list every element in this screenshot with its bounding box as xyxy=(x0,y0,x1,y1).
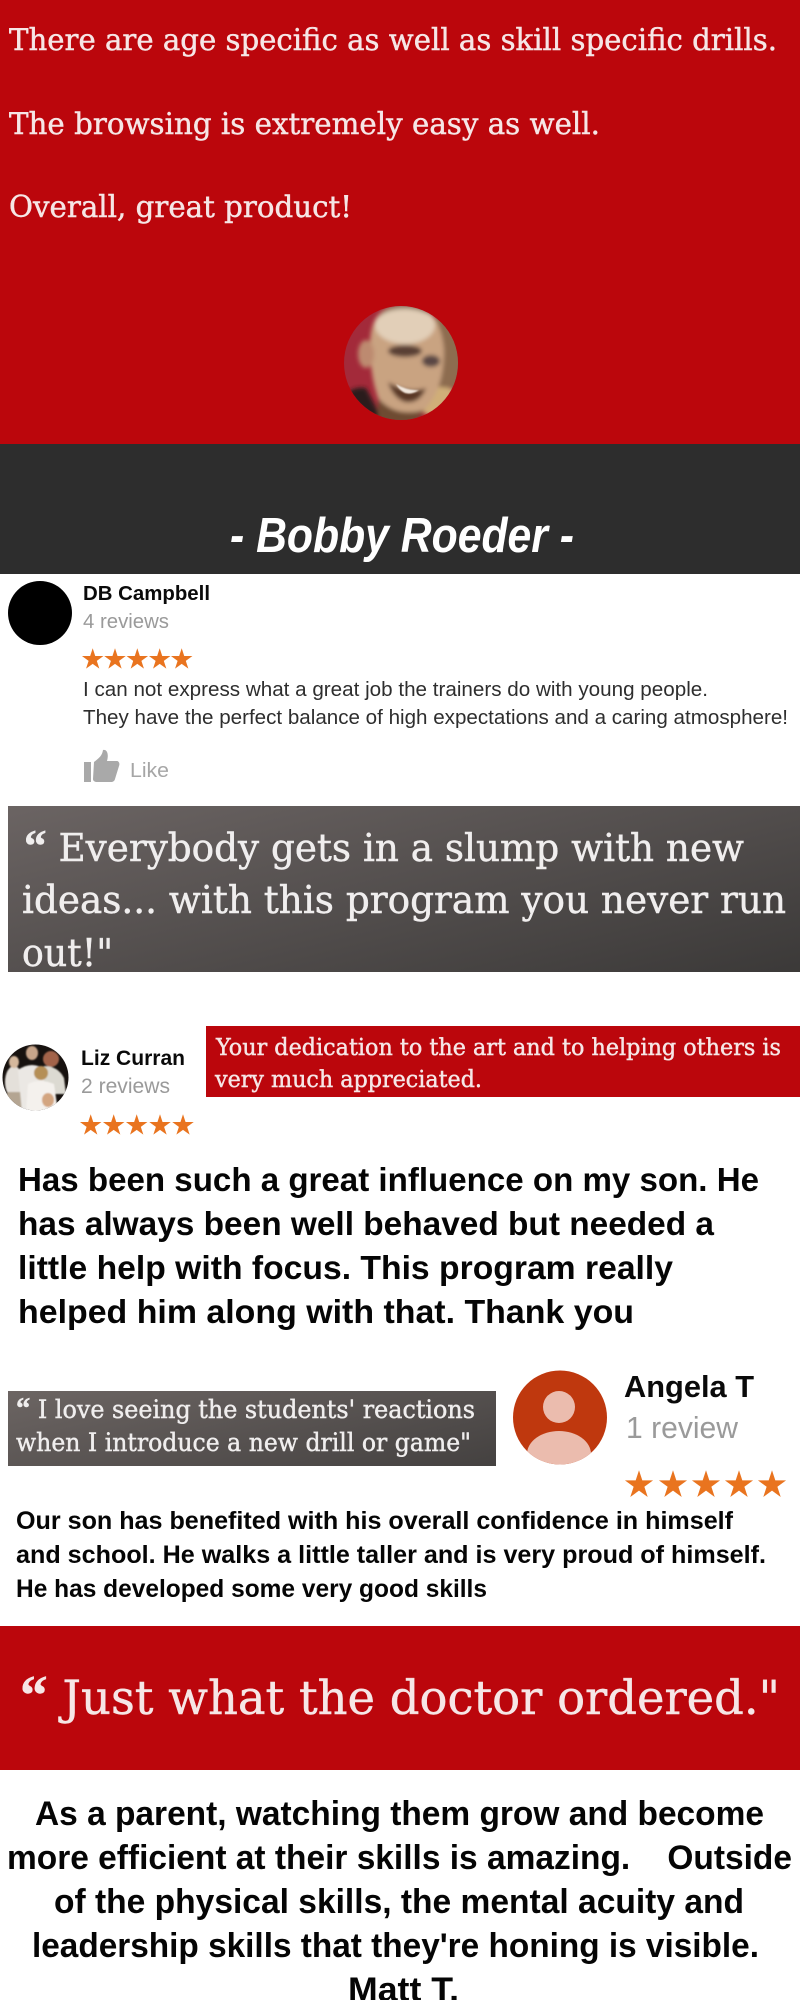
quote text: ideas... with this program you never run xyxy=(22,878,786,922)
quote text: when I introduce a new drill or game" xyxy=(16,1428,471,1457)
like label: Like xyxy=(130,760,169,782)
quote text: “ I love seeing the students' reactions xyxy=(16,1392,475,1425)
reviewer name: Angela T: Angela T xyxy=(624,1369,754,1404)
reviewer name: DB Campbell: DB Campbell xyxy=(83,583,210,605)
text block: Matt T. parent testimonial: leadership skills that they're honing is visible. xyxy=(32,1927,759,1965)
callout: dedication quote in red xyxy=(206,1026,800,1097)
text block: Liz Curran review text: helped him along with that. Thank you xyxy=(18,1293,634,1330)
heading: Bobby Roeder name: - Bobby Roeder - xyxy=(230,509,574,563)
text block: Angela T review text xyxy=(16,1507,766,1603)
icon: Angela T avatar xyxy=(513,1370,607,1464)
quote text: “ Everybody gets in a slump with new xyxy=(24,820,744,871)
icon: thumbs up xyxy=(84,750,119,782)
text block: Angela T review text: Our son has benefited with his overall confidence in himself xyxy=(16,1507,734,1535)
text block: Liz Curran review text: has always been well behaved but needed a xyxy=(18,1205,715,1242)
panel: grey quote, Everybody gets in a slump xyxy=(8,806,800,975)
review count: 2 reviews xyxy=(81,1075,170,1098)
icon: five star rating xyxy=(82,648,192,669)
panel: Angela T review xyxy=(16,1369,786,1603)
text block: Bobby Roeder testimonial: The browsing is extremely easy as well. xyxy=(9,107,600,142)
quote text: out!" xyxy=(22,931,113,975)
icon: Bobby Roeder portrait xyxy=(344,306,458,420)
panel: red testimonial from Bobby Roeder xyxy=(0,0,800,444)
icon: five star rating xyxy=(625,1470,786,1497)
quote text xyxy=(16,1392,475,1457)
icon: five star rating xyxy=(80,1114,194,1135)
quote text: “ Just what the doctor ordered." xyxy=(20,1665,780,1727)
text block: Bobby Roeder testimonial xyxy=(9,23,777,225)
panel: grey quote, students' reactions xyxy=(8,1391,496,1466)
callout: dedication quote in red: Your dedication to the art and to helping others is xyxy=(215,1035,781,1061)
text block: DB Campbell review text: They have the perfect balance of high expectations and a caring atmosphere! xyxy=(83,707,788,729)
text block: Matt T. parent testimonial: of the physical skills, the mental acuity and xyxy=(54,1883,744,1921)
reviewer name: Liz Curran: Liz Curran xyxy=(81,1047,185,1070)
panel: Liz Curran review xyxy=(2,1026,800,1330)
text block: Liz Curran review text: little help with focus. This program really xyxy=(18,1249,674,1286)
panel: red quote, just what the doctor ordered xyxy=(0,1626,800,1770)
text block: Bobby Roeder testimonial: Overall, great product! xyxy=(9,190,352,225)
icon: DB Campbell avatar xyxy=(8,581,72,645)
icon: Liz Curran family photo avatar xyxy=(2,1044,70,1112)
quote text xyxy=(22,820,786,975)
text block: Matt T. parent testimonial xyxy=(7,1795,792,2000)
text block: Matt T. parent testimonial: As a parent, watching them grow and become xyxy=(35,1795,764,1833)
callout: dedication quote in red: very much appreciated. xyxy=(214,1067,482,1093)
text block: Liz Curran review text: Has been such a great influence on my son. He xyxy=(18,1161,759,1198)
panel: dark name band xyxy=(0,444,800,574)
text block: Matt T. parent testimonial: more efficient at their skills is amazing. Outside xyxy=(7,1839,792,1877)
text block: Bobby Roeder testimonial: There are age specific as well as skill specific drills. xyxy=(9,23,777,58)
text block: DB Campbell review text: I can not express what a great job the trainers do with young people. xyxy=(83,679,708,701)
review count: 1 review xyxy=(626,1410,739,1445)
text block: Liz Curran review text xyxy=(18,1161,759,1330)
panel: DB Campbell review xyxy=(8,581,788,782)
text block: Angela T review text: He has developed some very good skills xyxy=(16,1575,487,1603)
text block: Angela T review text: and school. He walks a little taller and is very proud of himself. xyxy=(16,1541,766,1569)
review count: 4 reviews xyxy=(83,611,169,633)
text block: DB Campbell review text xyxy=(83,679,788,729)
